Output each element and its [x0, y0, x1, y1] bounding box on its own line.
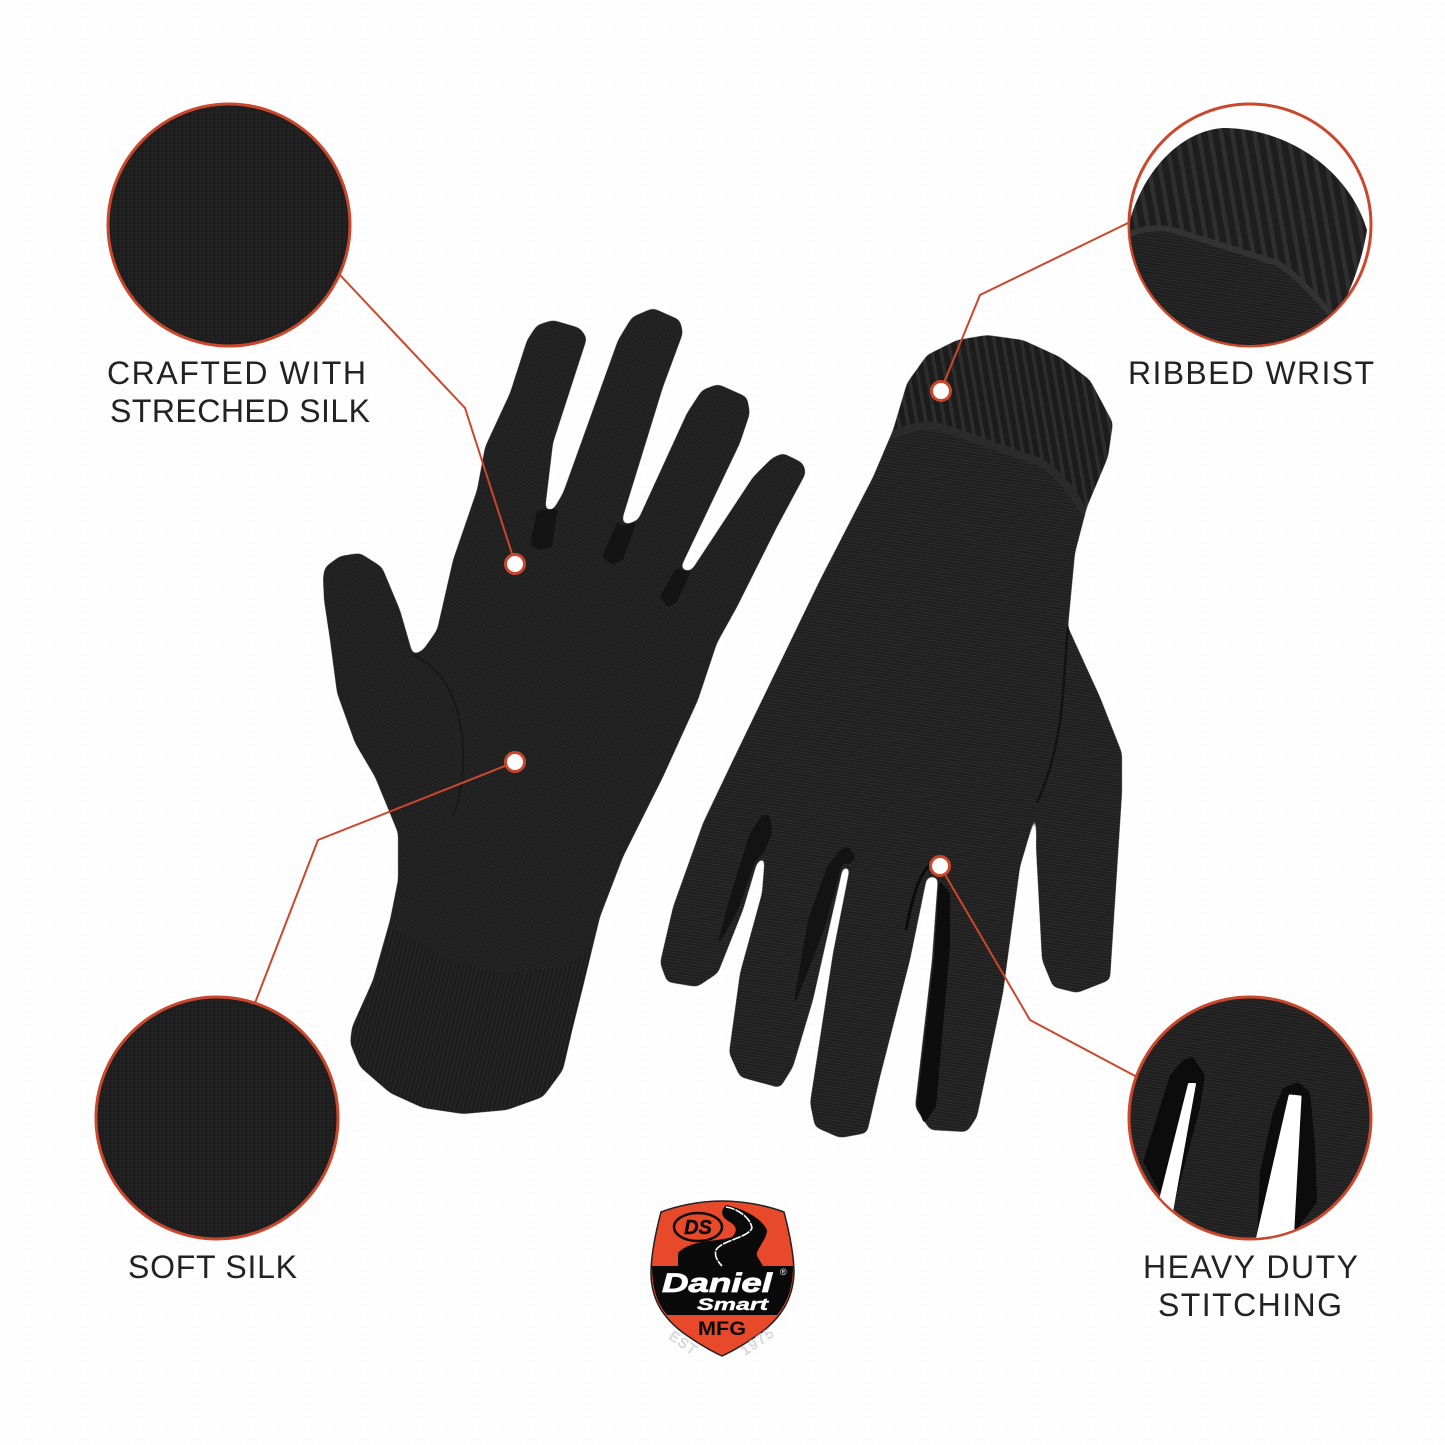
- label: HEAVY DUTY: [1143, 1249, 1358, 1285]
- label: RIBBED WRIST: [1128, 355, 1374, 391]
- left glove fabric texture: [318, 303, 812, 1119]
- marker dot: [506, 554, 524, 574]
- detail circle: ribbed cuff: [1125, 104, 1371, 360]
- right glove thumb seam: [1037, 627, 1068, 803]
- right glove left stitch: [906, 865, 930, 930]
- road centre line: [715, 1207, 752, 1266]
- right glove ribbed cuff: [893, 336, 1112, 507]
- brand subname: Smart: [697, 1295, 770, 1314]
- infographic canvas: [94, 102, 1374, 1357]
- left glove finger slit pockets: [530, 508, 691, 607]
- detail circle: silk fabric: [108, 104, 350, 346]
- DS emblem: DS: [684, 1217, 713, 1239]
- right glove finger slit pockets: [716, 815, 950, 1124]
- marker dot: [506, 752, 524, 772]
- detail circle: finger stitching: [1129, 997, 1371, 1245]
- marker dot: [930, 856, 950, 876]
- registered mark: ®: [780, 1267, 787, 1277]
- label: STITCHING: [1158, 1287, 1342, 1323]
- marker dot: [932, 382, 950, 400]
- label: STRECHED SILK: [110, 393, 370, 429]
- left glove: [318, 303, 812, 1125]
- right glove: [655, 330, 1125, 1142]
- DS emblem: [674, 1213, 722, 1241]
- leader line: [940, 866, 1137, 1077]
- right glove cuff band: [888, 426, 1085, 514]
- left glove ribbed cuff: [351, 928, 590, 1113]
- leader line: [941, 222, 1130, 390]
- 1975: 1975: [738, 1325, 776, 1358]
- right glove body: [660, 430, 1122, 1138]
- black band: [652, 1266, 793, 1315]
- leader line: [255, 762, 515, 1003]
- left glove thumb seam: [413, 655, 463, 815]
- MFG: MFG: [698, 1319, 746, 1340]
- label: CRAFTED WITH: [107, 355, 366, 391]
- road: [678, 1205, 767, 1266]
- logo: Daniel Smart MFG shield: [651, 1201, 794, 1358]
- left glove body: [323, 308, 806, 973]
- brand name: Daniel: [662, 1268, 773, 1298]
- EST: EST: [666, 1327, 700, 1358]
- callout: heavy duty stitching: [930, 856, 1371, 1323]
- callout: ribbed wrist: [932, 104, 1374, 400]
- shield body: [651, 1201, 794, 1356]
- leader line: [340, 275, 515, 563]
- detail circle: soft fabric: [96, 997, 338, 1239]
- callout: crafted with stretched silk: [107, 104, 524, 574]
- right glove fabric texture: [661, 430, 1122, 1137]
- callout: soft silk: [96, 752, 524, 1285]
- label: SOFT SILK: [128, 1249, 297, 1285]
